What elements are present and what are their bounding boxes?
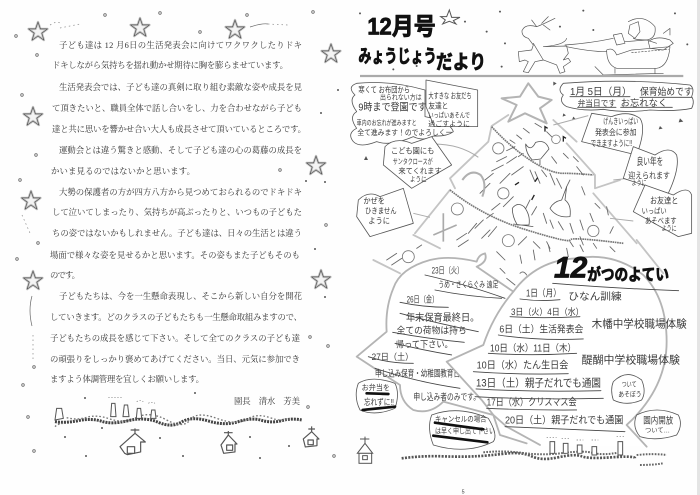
note: performance wish: 発表会に参加	[595, 127, 637, 137]
note: health wish	[357, 188, 413, 237]
note: santa wish	[383, 137, 452, 188]
text block: message body: の頑張りをしっかり褒めてあげてください。当日、元気に参加でき	[50, 354, 300, 364]
text block: December events: 木幡中学校職場体験	[592, 317, 687, 331]
signature: 園長 清水 芳美	[234, 396, 301, 406]
note: new year wish: 良い年を	[637, 155, 663, 168]
callout: cold mornings	[351, 82, 453, 145]
text block: message body: ちの姿ではないかもしれません。子ども達は、日々の生活とは違う	[52, 228, 302, 238]
text block: message body: していきます。どのクラスの子どもたちも一生懸命取組みますので、	[50, 312, 302, 322]
divider: ground line	[360, 72, 683, 79]
note: santa wish: こども園にも	[391, 146, 434, 155]
text block: year-end events: 27日（土）	[372, 351, 413, 362]
callout: cold mornings: 寒くて お布団から	[358, 85, 410, 95]
panel: director's message	[15, 11, 340, 459]
title: newsletter name: だより	[436, 51, 486, 73]
note: play wish	[633, 185, 692, 237]
text block: message body: ドキしながら気持ちを揺れ動かせ期待に胸を膨らませています。	[52, 60, 288, 70]
callout: cold mornings: 全て進みます！のでよろしくー	[357, 128, 452, 137]
heading: schedule title: 12	[554, 252, 588, 285]
text block: December events: 20日（土）親子だれでも通園	[505, 413, 623, 426]
panel: right page upper half	[351, 10, 693, 248]
note: new year wish	[623, 147, 677, 193]
text block: December events: ひなん訓練	[568, 290, 622, 303]
callout: cold mornings: 9時まで登園です	[358, 101, 427, 114]
text block: December events: 6日（土）生活発表会	[499, 323, 584, 335]
text block: year-end events: 帰って下さい。	[396, 339, 453, 350]
text block: year-end events: 26日（金）	[407, 293, 438, 304]
title: newsletter name: みょうじょう	[358, 47, 437, 67]
text block: message body: 大勢の保護者の方が四方八方から見つめておられるのでドキドキ	[59, 187, 302, 197]
note: play wish: お友達と	[650, 194, 678, 205]
note: performance wish	[582, 113, 643, 155]
text block: message body: 子ども達は 12 月6日の生活発表会に向けてワクワクしたりドキ	[59, 40, 302, 50]
text block: message body: のです。	[50, 271, 80, 280]
note: play wish: あそべます	[645, 216, 677, 225]
text block: message body: かいま見るのではないかと思います。	[51, 167, 195, 176]
note: friends wish: 大すきな お友だち	[428, 90, 472, 100]
text block: year-end events	[368, 265, 505, 402]
text block: December events: 17日（水）クリスマス会	[487, 396, 577, 409]
title: newsletter name	[358, 47, 486, 73]
callout: cancellation notice: キャンセルの場合	[435, 414, 487, 424]
panel: December schedule bubble	[447, 252, 687, 447]
icon: stars around the message	[15, 11, 340, 459]
text block: message body: て頂きたいと、職員全体で話し合いをし、力を合わせながら子ども	[52, 103, 302, 113]
callout: lunch reminder: お弁当を	[362, 382, 390, 392]
decoration: candles and garland	[55, 398, 302, 427]
icon: houses	[120, 426, 319, 455]
note: santa wish: ように	[410, 176, 427, 184]
text block: message body: して泣いてしまったり、気持ちが高ぶったりと、いつもの子どもた	[52, 207, 302, 217]
text block: December events: 13日（土）親子だれでも通園	[476, 377, 601, 390]
text block: message body: 達と共に思いを響かせ合い大人も成長させて頂いているところです。	[52, 124, 306, 134]
text block: message body: 運動会とは違う驚きと感動、そして子ども達の心の葛藤の成長を	[59, 145, 302, 155]
text block: year-end events: 年末保育最終日。	[406, 311, 479, 324]
note: santa wish: 来てくれます	[398, 166, 442, 175]
callout: January notice: 1月 5日（月）	[570, 86, 632, 98]
callout: cancellation notice	[430, 411, 495, 449]
note: health wish: ように	[368, 216, 390, 225]
callout: cold mornings: 出られない方は	[380, 92, 422, 101]
heading: schedule title: がつのよてい	[587, 265, 669, 284]
text block: year-end events: うめ・さくらぐみ 遠足	[438, 279, 499, 290]
text block: December events: 1日（月）	[526, 288, 561, 300]
outline: year-end bubble edge	[357, 253, 527, 443]
callout: play together	[612, 375, 644, 403]
text block: December events	[473, 288, 687, 432]
outline: December bubble edge	[447, 257, 667, 447]
note: friends wish: 友達と	[428, 100, 448, 110]
note: health wish: かぜを	[363, 196, 385, 205]
panel: right page lower half	[356, 240, 687, 495]
text block: December events: 醍醐中学校職場体験	[582, 352, 680, 366]
text block: December events: 10日（水）たん生日会	[477, 358, 568, 371]
callout: January notice: 保育始めです	[640, 86, 693, 98]
note: performance wish: げんきいっぱい	[603, 117, 638, 126]
text block: year-end events: 全ての荷物は持ち	[397, 324, 467, 335]
note: santa wish: サンタクロースが	[393, 157, 433, 166]
note: friends wish: 過ごすように	[428, 119, 470, 128]
callout: centre opening: 園内開放	[643, 414, 674, 425]
icon: bell	[550, 187, 570, 217]
icon: bird on upper tier	[526, 141, 549, 165]
callout: cold mornings: 車内のお忘れが進みますと	[357, 118, 417, 127]
callout: January notice: お忘れなく	[621, 98, 667, 108]
text block: message body: 子どもたちの成長を感じて下さい。そして全てのクラスの子ども達	[50, 333, 301, 343]
title: 12月号: 12月号	[367, 14, 436, 41]
callout: play together: ついて	[622, 381, 637, 389]
text block: message body: 場面で様々な姿を見せるかと思います。その姿もまた子どもそのも	[50, 250, 300, 260]
icon: reindeer	[518, 17, 613, 73]
icon: santa on sleigh	[595, 18, 673, 75]
note: friends wish: いっぱいあそんで	[428, 111, 470, 119]
text block: December events: 10日（水）11日（木）	[490, 343, 576, 355]
text block: message body: 子どもたちは、今を一生懸命表現し、そこから新しい自分を開花	[59, 291, 303, 301]
heading: schedule title	[553, 252, 679, 291]
chart: christmas tree	[413, 83, 637, 248]
note: play wish: いっぱい	[642, 206, 667, 215]
callout: lunch reminder: 忘れずに!!	[364, 397, 394, 407]
callout: centre opening: ついて…	[645, 427, 670, 434]
icon: music notes	[515, 127, 566, 200]
icon: church	[357, 437, 373, 463]
text block: year-end events: 申し込み保育・幼稚園教育日	[375, 368, 460, 379]
callout: play together: あそぼう	[618, 391, 642, 399]
text block: message body	[50, 40, 306, 384]
note: friends wish	[426, 80, 478, 128]
callout: centre opening	[635, 410, 680, 439]
icon: night sky dots	[359, 10, 688, 160]
icon: bird on lower tier	[512, 205, 533, 227]
note: performance wish: できますように!!	[591, 139, 632, 148]
note: play wish: ように	[662, 225, 677, 233]
note: health wish: ひきません	[365, 206, 397, 215]
text block: December events: 3日（火）4日（水）	[511, 306, 584, 317]
text block: message body: ますよう体調管理を宜しくお願いします。	[50, 374, 204, 384]
icon: title star	[441, 10, 460, 24]
note: new year wish: ように	[632, 179, 647, 187]
callout: January notice	[560, 81, 693, 112]
icon: cross ornament	[433, 213, 457, 242]
decoration: lower garland and candles	[402, 437, 667, 465]
panel: year-end schedule bubble	[357, 253, 527, 443]
text block: message body: 生活発表会では、子ども達の真剣に取り組む素敵な姿や成長を見	[59, 82, 303, 92]
callout: January notice: 弁当日です	[578, 98, 616, 108]
text block: year-end events: 23日（火）	[432, 265, 463, 275]
callout: cancellation notice: は早く申し出て下さい	[435, 426, 495, 435]
chart: lower tree hatching	[373, 240, 663, 285]
note: new year wish: 迎えられます	[628, 169, 670, 180]
text block: year-end events: 申し込み者のみです。	[413, 391, 480, 402]
callout: lunch reminder	[356, 379, 397, 413]
